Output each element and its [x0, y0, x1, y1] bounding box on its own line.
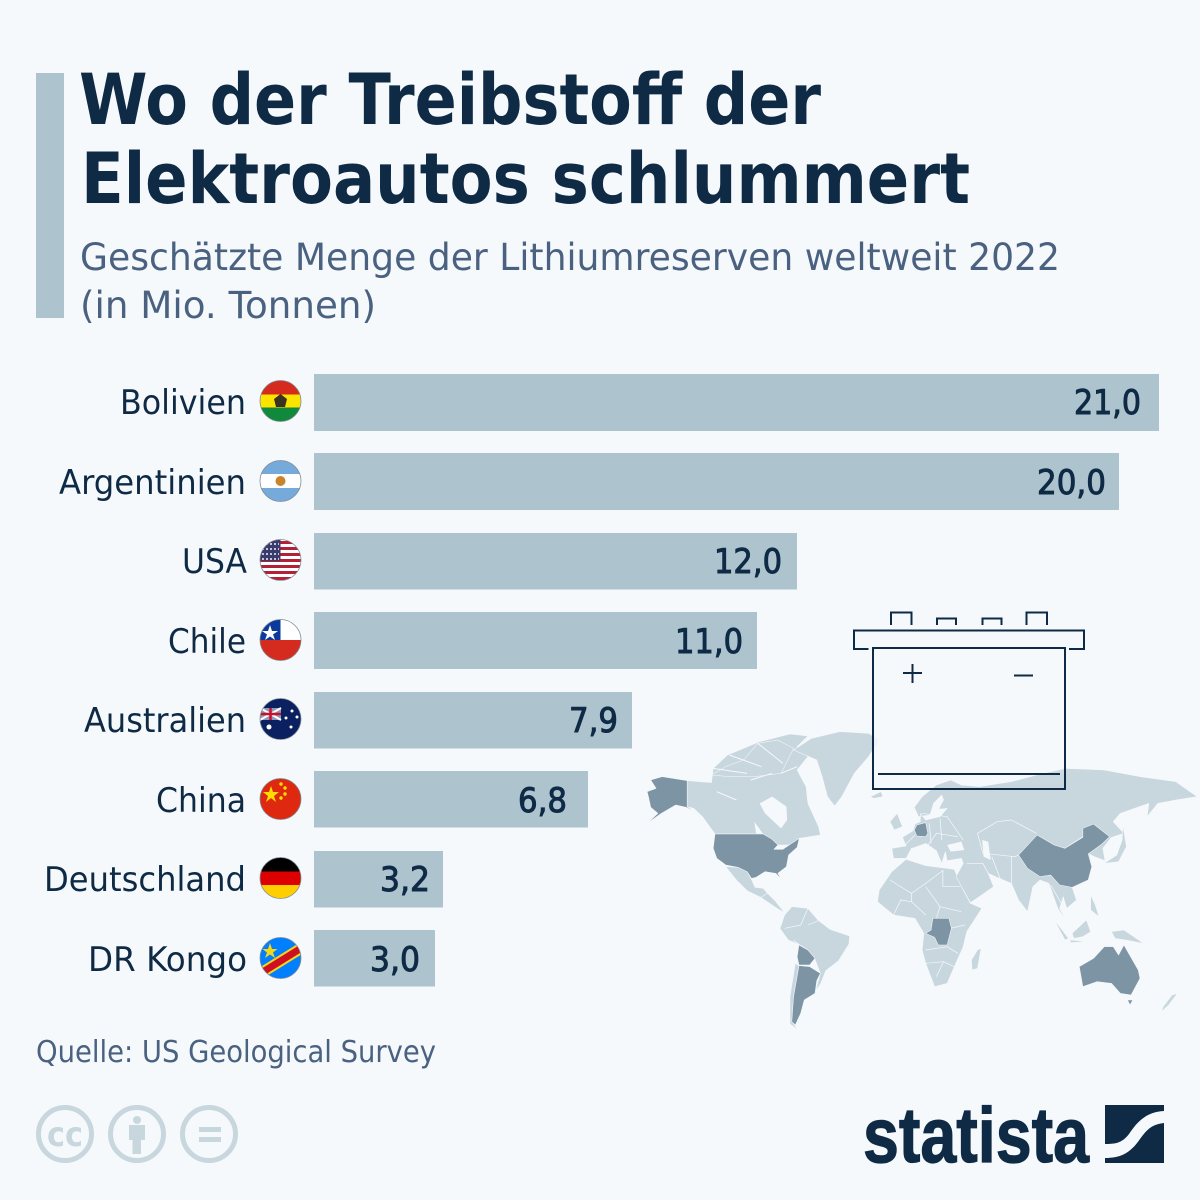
flag: Australia	[260, 698, 301, 740]
bar: Australien: Australien	[84, 701, 246, 741]
bar: USA	[182, 533, 797, 590]
world map	[647, 732, 1197, 1030]
bar: Australien: 7,9	[569, 701, 618, 741]
bar: China: China	[156, 781, 246, 821]
flag: Argentina	[260, 460, 301, 502]
bar: USA: 12,0	[714, 542, 782, 582]
bar: China: 6,8	[518, 781, 567, 821]
statista logo: statista	[863, 1091, 1090, 1179]
bar: Chile	[168, 612, 757, 669]
title: Elektroautos schlummert	[81, 138, 970, 220]
flag: China	[260, 778, 301, 820]
icon: attribution	[110, 1108, 164, 1160]
icon: cc: cc	[47, 1115, 83, 1155]
bar: Argentinien	[59, 453, 1119, 510]
icon: battery	[854, 612, 1084, 789]
source: Quelle: US Geological Survey	[36, 1035, 436, 1070]
map: highlighted countries	[647, 777, 1140, 1025]
licence icons	[38, 1108, 236, 1160]
bar: USA: USA	[182, 542, 247, 582]
bar: Chile: Chile	[168, 622, 246, 662]
flag: USA	[260, 539, 301, 581]
bar chart	[44, 374, 1159, 986]
title: Wo der Treibstoff der	[79, 59, 821, 141]
subtitle: Geschätzte Menge der Lithiumreserven weltweit 2022	[80, 236, 1060, 279]
flag outlines	[260, 380, 301, 978]
bar: Chile: 11,0	[675, 622, 743, 662]
map: seas	[754, 797, 991, 860]
bar: Bolivien: 21,0	[1074, 383, 1141, 423]
bar: Deutschland	[44, 851, 443, 908]
map: internal borders	[713, 743, 1083, 977]
title	[79, 59, 970, 220]
bar: Australien	[84, 692, 632, 748]
bar: DR Kongo	[88, 930, 435, 986]
icon: statista mark	[1105, 1105, 1164, 1163]
bar: DR Kongo: DR Kongo	[88, 940, 247, 980]
subtitle: (in Mio. Tonnen)	[80, 284, 376, 327]
bar: Deutschland: 3,2	[380, 860, 430, 900]
title accent bar	[36, 73, 64, 318]
bar: DR Kongo: 3,0	[370, 940, 420, 980]
bar: Bolivien: Bolivien	[120, 383, 246, 423]
bar: Deutschland: Deutschland	[44, 860, 246, 900]
bar: Argentinien: Argentinien	[59, 463, 246, 503]
flag: Germany	[260, 857, 301, 899]
flag: Bolivia	[260, 380, 301, 422]
bar: Bolivien	[120, 374, 1159, 431]
icon: cc	[38, 1108, 92, 1160]
map: light countries	[687, 732, 1197, 1030]
icon: no derivatives	[182, 1108, 236, 1160]
bar: Argentinien: 20,0	[1037, 463, 1106, 503]
flag: DR Congo	[260, 938, 301, 978]
bar: China	[156, 771, 588, 828]
flag: Chile	[260, 619, 301, 661]
subtitle	[80, 236, 1060, 327]
